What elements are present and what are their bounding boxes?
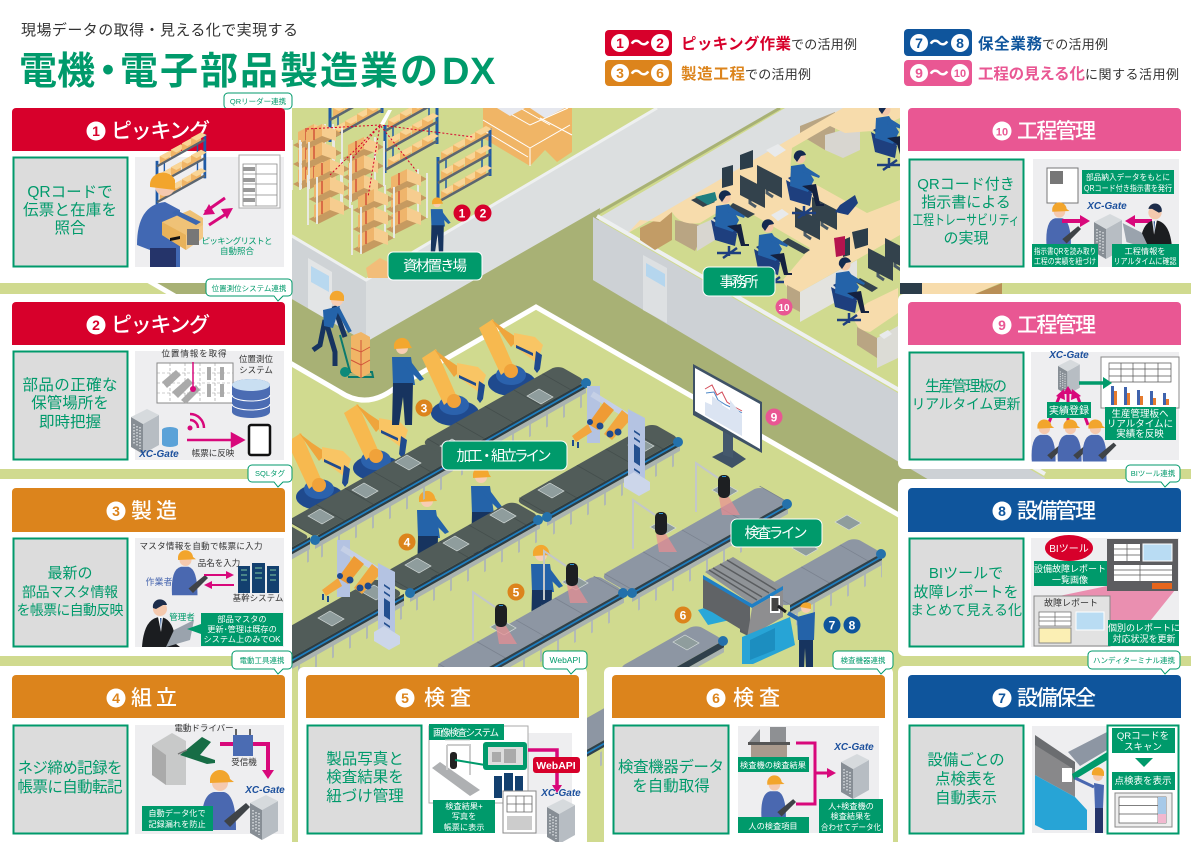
conveyor D3	[515, 423, 683, 528]
conveyor D1	[421, 365, 591, 469]
illustration: QRコードを	[1117, 731, 1169, 742]
tag	[543, 651, 587, 674]
header: 2	[92, 317, 100, 333]
illustration: システム	[239, 365, 273, 375]
area label: materials	[388, 252, 482, 280]
panel 4: assembly	[12, 651, 292, 840]
summary	[910, 160, 1024, 266]
legend: manufacturing: 3	[616, 65, 624, 81]
illustration	[1032, 726, 1178, 834]
legend: maintenance: 保全業務	[978, 34, 1042, 53]
inspection conveyors	[434, 483, 886, 782]
legend: manufacturing	[605, 60, 811, 86]
summary: 部品マスタ情報	[22, 584, 118, 600]
header	[306, 675, 579, 718]
summary: 工程トレーサビリティ	[912, 212, 1020, 228]
legend: visualization: 工程の見える化	[978, 65, 1085, 83]
illustration: XC-Gate	[138, 449, 179, 460]
summary: 即時把握	[39, 413, 101, 431]
summary	[14, 352, 128, 460]
scene markers: 1	[459, 206, 466, 220]
illustration: 生産管理板へ	[1111, 408, 1169, 420]
illustration: システム上のみでOK	[203, 635, 281, 644]
area label: materials: 資材置き場	[403, 258, 467, 275]
QR inspection gate machine	[698, 557, 795, 664]
corridor	[100, 188, 1040, 596]
summary: 照合	[54, 219, 86, 237]
scene markers	[398, 204, 860, 634]
illustration: 帳票に表示	[444, 822, 484, 832]
illustration: ピッキングリストと	[202, 236, 272, 246]
summary: 紐づけ管理	[326, 787, 404, 805]
legend: picking: ～	[630, 33, 650, 55]
legend: visualization: 10	[954, 68, 966, 80]
summary: 生産管理板の	[925, 377, 1007, 395]
illustration: 工程の実績を紐づけ	[1034, 256, 1096, 266]
illustration: 人+検査機の	[828, 801, 874, 811]
legend: maintenance: 7	[915, 35, 923, 51]
summary: リアルタイム更新	[912, 396, 1020, 412]
illustration	[1031, 535, 1180, 647]
legend: visualization: ～	[929, 63, 949, 85]
legend: maintenance: 8	[956, 35, 964, 51]
legend	[605, 29, 1179, 86]
workers behind lines	[392, 338, 563, 632]
legend: visualization: 9	[915, 65, 923, 81]
header: 5	[401, 690, 409, 706]
conveyor G1	[600, 486, 792, 604]
tag: WebAPI	[549, 655, 581, 665]
area label: assembly line: 加工・組立ライン	[456, 448, 552, 465]
illustration: 工程情報を	[1125, 246, 1165, 256]
illustration: XC-Gate	[1086, 201, 1127, 212]
summary: 帳票に自動転記	[18, 778, 122, 796]
header: 6	[712, 690, 720, 706]
summary: 自動表示	[935, 789, 997, 807]
production monitor	[693, 364, 762, 468]
illustration: 写真を	[452, 811, 476, 821]
header: 10	[996, 126, 1008, 138]
tag: BIツール連携	[1131, 468, 1176, 478]
illustration	[135, 538, 284, 647]
summary: 製品写真と	[326, 750, 404, 768]
panel 8: equipment management	[908, 465, 1181, 647]
factory floor plan scene	[100, 63, 1045, 782]
illustration: 検査結果+	[445, 801, 483, 811]
illustration: 一覧画像	[1052, 574, 1088, 585]
summary: の実現	[943, 230, 989, 247]
summary: を自動取得	[632, 777, 710, 795]
illustration: 自動データ化で	[148, 808, 206, 818]
illustration: 品名を入力	[198, 558, 240, 568]
illustration: マスタ情報を自動で帳票に入力	[140, 541, 262, 551]
legend: manufacturing: 製造工程	[681, 65, 745, 83]
inspection cameras	[473, 463, 740, 644]
panel 5: inspection	[306, 651, 587, 842]
summary	[910, 352, 1024, 460]
illustration: 画像検査システム	[433, 727, 499, 739]
illustration	[429, 724, 581, 842]
tag: ハンディターミナル連携	[1093, 655, 1175, 665]
scene markers: 6	[680, 608, 687, 622]
legend: manufacturing: での活用例	[745, 67, 811, 82]
header	[612, 675, 885, 718]
illustration: 部品マスタの	[217, 615, 267, 624]
header	[908, 108, 1181, 151]
illustration: 点検表を表示	[1114, 775, 1172, 787]
illustration	[1031, 350, 1179, 462]
summary: を帳票に自動反映	[16, 602, 124, 618]
legend: maintenance: での活用例	[1042, 37, 1108, 52]
main title: 電機・電子部品製造業のDX	[19, 51, 496, 93]
illustration: 更新･管理は既存の	[207, 624, 277, 634]
tag: 位置測位システム連携	[212, 283, 287, 293]
dark conveyors	[222, 365, 683, 671]
header	[908, 675, 1181, 718]
illustration: 実績登録	[1049, 404, 1089, 417]
header: 検 査	[424, 687, 471, 710]
summary: 部品の正確な	[22, 376, 118, 394]
illustration: リアルタイムに確認	[1114, 256, 1176, 266]
circuit boards	[308, 389, 654, 626]
illustration	[135, 132, 284, 267]
illustration: 故障レポート	[1044, 597, 1098, 608]
illustration: 部品納入データをもとに	[1086, 172, 1170, 182]
warehouse worker	[431, 197, 451, 251]
scene markers: 5	[513, 586, 520, 600]
header	[908, 302, 1181, 345]
illustration: 実績を反映	[1116, 428, 1164, 440]
tag	[224, 93, 292, 114]
scene markers: 10	[778, 303, 790, 314]
area label: inspection line: 検査ライン	[744, 525, 808, 542]
conveyor D5	[244, 578, 404, 671]
summary	[614, 726, 728, 834]
summary: 設備ごとの	[927, 751, 1005, 769]
panel 6: inspection	[612, 651, 893, 834]
legend: visualization	[904, 60, 1179, 86]
area label: office: 事務所	[720, 274, 758, 291]
conveyor G2	[434, 575, 628, 694]
warehouse racks and storage	[292, 63, 572, 278]
tag	[1088, 651, 1180, 674]
robot gates	[322, 386, 650, 650]
panel 1: picking QR	[12, 93, 292, 267]
scene markers: 7	[829, 618, 836, 632]
header	[12, 108, 285, 151]
header: ピッキング	[111, 314, 210, 337]
legend: picking: 1	[616, 35, 624, 51]
illustration	[131, 348, 284, 460]
header	[908, 488, 1181, 532]
conveyor G3	[758, 537, 886, 619]
summary	[14, 158, 128, 266]
header: ピッキング	[111, 120, 210, 143]
header: 検 査	[733, 687, 780, 710]
header: 組 立	[131, 687, 177, 710]
scene markers: 4	[404, 536, 411, 550]
tag: 検査機器連携	[840, 655, 886, 665]
summary	[910, 538, 1024, 646]
legend: manufacturing: ～	[630, 63, 650, 85]
illustration: 基幹システム	[233, 593, 283, 603]
illustration: 受信機	[231, 757, 257, 767]
area label: assembly line	[442, 441, 567, 470]
legend: maintenance: ～	[929, 33, 949, 55]
summary: QRコード付き	[917, 176, 1015, 193]
area label: inspection line	[731, 519, 822, 547]
illustration: BIツール	[1049, 544, 1089, 555]
conveyor gap	[502, 698, 650, 782]
corridor white lines	[130, 270, 1040, 596]
conveyor D4	[378, 501, 543, 604]
header: 工程管理	[1017, 120, 1096, 143]
conveyor stub left	[222, 521, 310, 585]
illustration: 人の検査項目	[748, 821, 798, 831]
illustration	[135, 723, 285, 840]
illustration: 指示書QRを読み取り	[1034, 246, 1096, 256]
header: 工程管理	[1017, 314, 1096, 337]
illustration: XC-Gate	[244, 785, 285, 796]
summary: 故障レポートを	[913, 584, 1019, 601]
summary: 点検表を	[935, 770, 997, 788]
header: 設備管理	[1017, 500, 1096, 523]
illustration: 自動照合	[220, 246, 254, 256]
header: 7	[998, 690, 1006, 706]
scene markers: 9	[771, 410, 778, 424]
panel 7: equipment maintenance	[908, 651, 1181, 834]
header	[12, 302, 285, 345]
area label: office	[703, 267, 775, 296]
maintenance worker	[778, 602, 815, 670]
summary: 指示書による	[921, 194, 1011, 211]
illustration: XC-Gate	[833, 742, 874, 753]
scene markers: 8	[849, 618, 856, 632]
header: 設備保全	[1017, 687, 1096, 710]
legend: picking: での活用例	[791, 37, 857, 52]
hand truck and boxes	[313, 291, 373, 378]
illustration: 位置測位	[239, 354, 273, 364]
header: 1	[92, 123, 100, 139]
illustration: リアルタイムに	[1107, 419, 1173, 430]
header: 製 造	[131, 500, 177, 523]
legend: picking	[605, 30, 857, 56]
tag	[1126, 465, 1180, 487]
illustration	[738, 726, 883, 833]
gray belt boards	[490, 483, 861, 650]
panel 2: picking location	[12, 279, 292, 460]
header: 4	[112, 690, 120, 706]
illustration: QRコード付き指示書を発行	[1084, 183, 1172, 193]
summary: BIツールで	[929, 565, 1003, 582]
summary: ネジ締め記録を	[18, 759, 122, 777]
header	[12, 675, 285, 718]
legend: picking: ピッキング作業	[681, 34, 791, 53]
illustration: 記録漏れを防止	[148, 819, 206, 829]
illustration: スキャン	[1124, 742, 1162, 753]
conveyor D2	[287, 443, 453, 551]
scene markers: 2	[480, 206, 487, 220]
illustration: 検査機の検査結果	[740, 760, 806, 770]
tag: 電動工具連携	[240, 655, 285, 665]
summary: 最新の	[47, 565, 93, 582]
summary: 検査結果を	[326, 768, 404, 786]
illustration: 管理者	[169, 612, 195, 622]
illustration: 帳票に反映	[192, 448, 235, 458]
tag	[248, 465, 292, 487]
panel 3: manufacturing	[12, 465, 292, 647]
tag: QRリーダー連携	[230, 96, 287, 106]
tag: SQLタグ	[255, 468, 285, 478]
illustration: 合わせてデータ化	[821, 822, 881, 832]
legend: picking: 2	[656, 35, 664, 51]
summary: QRコードで	[27, 184, 113, 201]
summary	[14, 538, 128, 646]
header: 8	[998, 503, 1006, 519]
warehouse outer walls	[100, 108, 780, 342]
tag	[232, 651, 292, 674]
summary	[308, 726, 422, 834]
legend: manufacturing: 6	[656, 65, 664, 81]
summary	[14, 726, 128, 834]
illustration: 電動ドライバー	[174, 723, 234, 733]
illustration: 設備故障レポート	[1034, 563, 1106, 574]
illustration: 検査結果を	[831, 811, 871, 821]
illustration: XC-Gate	[1048, 350, 1089, 361]
scene markers: 3	[421, 402, 428, 416]
summary: まとめて見える化	[910, 602, 1022, 618]
illustration: 個別のレポートに	[1108, 622, 1180, 633]
subtitle: 現場データの取得・見える化で実現する	[21, 21, 298, 39]
legend: maintenance	[904, 29, 1108, 56]
illustration: 位置情報を取得	[162, 348, 227, 358]
illustration: 対応状況を更新	[1112, 633, 1176, 644]
header: 9	[998, 317, 1006, 333]
header	[12, 488, 285, 532]
illustration: XC-Gate	[540, 788, 581, 799]
office	[593, 102, 1045, 540]
panel 9: process management board	[908, 302, 1181, 462]
illustration: 作業者	[145, 576, 173, 587]
summary: 検査機器データ	[618, 757, 724, 776]
summary: 保管場所を	[31, 394, 109, 412]
summary	[910, 726, 1024, 834]
panel 10: process management QR	[908, 108, 1181, 267]
summary: 伝票と在庫を	[23, 201, 117, 219]
illustration	[1032, 159, 1179, 267]
tag	[206, 279, 292, 301]
illustration: WebAPI	[536, 760, 576, 772]
tag	[833, 651, 893, 674]
legend: visualization: に関する活用例	[1085, 67, 1179, 82]
header: 3	[112, 503, 120, 519]
assembly line robots	[287, 319, 543, 510]
conveyor G5	[618, 624, 728, 694]
